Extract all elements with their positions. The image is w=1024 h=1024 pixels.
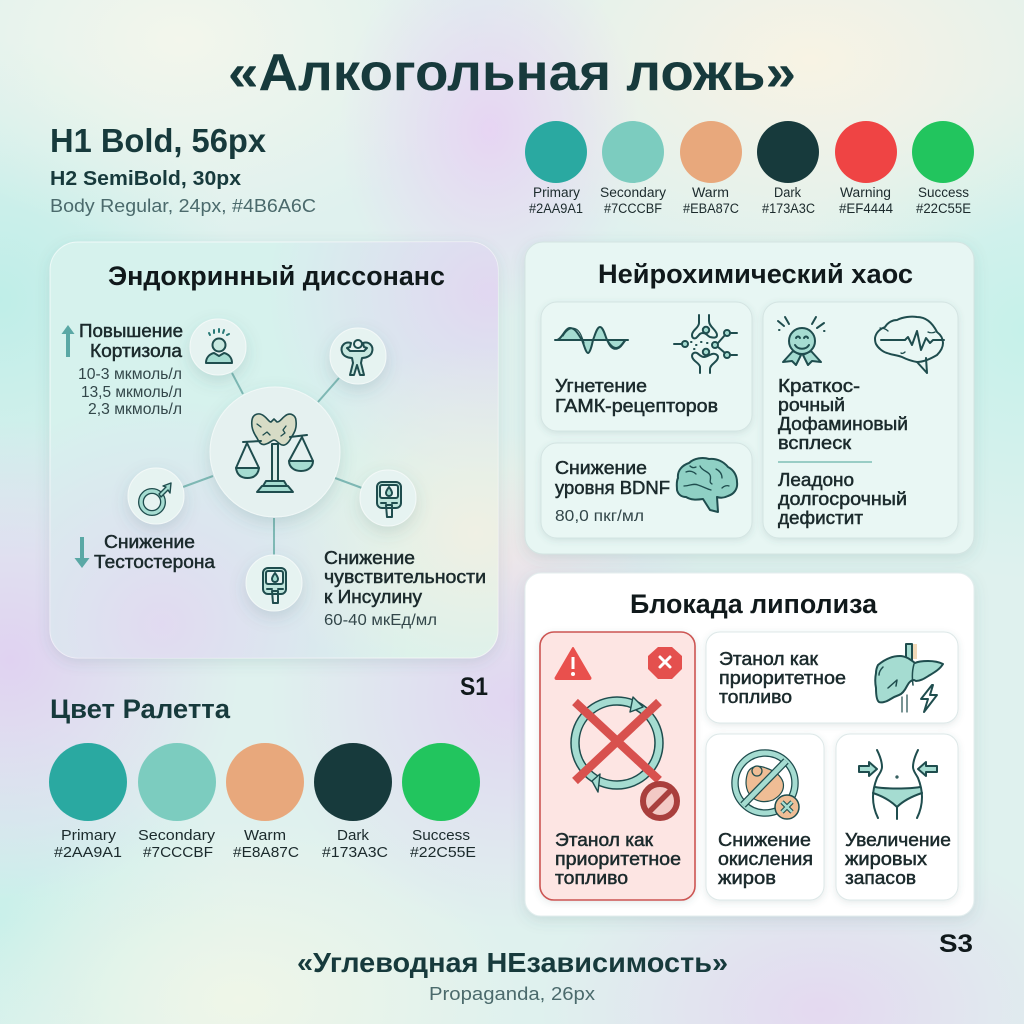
swatch: secondary [138, 743, 216, 861]
text: Снижение [718, 830, 811, 850]
testosterone text: Снижение [104, 532, 195, 552]
swatch: warm: Warm [244, 827, 286, 844]
text: приоритетное [555, 849, 681, 869]
text: 80,0 пкг/мл [555, 508, 644, 525]
text: приоритетное [719, 668, 846, 688]
node: glucose meter [360, 470, 416, 526]
H2 sample: H2 SemiBold, 30px [50, 167, 242, 190]
testosterone text: Тестостерона [94, 552, 216, 572]
swatch: secondary: Secondary [138, 827, 216, 844]
text [555, 830, 681, 888]
panel heading: Эндокринный диссонанс [108, 261, 445, 291]
text [778, 376, 908, 528]
panel: endocrine dissonance [50, 242, 498, 658]
swatch: primary [49, 743, 127, 861]
footer [297, 947, 728, 1004]
swatch: warm: #E8A87C [233, 844, 299, 861]
text: Леадоно [778, 470, 854, 490]
swatch: dark: Dark [774, 185, 801, 200]
swatch: warm: Warm [692, 185, 729, 200]
text [845, 830, 951, 888]
swatch: warm [226, 743, 304, 861]
card: GABA receptors [541, 302, 752, 431]
icon: liver [875, 644, 943, 712]
swatch: dark: #173A3C [762, 201, 815, 216]
icon: warning triangle [556, 648, 590, 679]
swatch: success: Success [412, 827, 470, 844]
swatch: dark: #173A3C [322, 844, 388, 861]
text: дефистит [778, 508, 863, 528]
insulin text: к Инсулину [324, 587, 422, 607]
icon: waist [859, 750, 937, 819]
text: топливо [719, 687, 792, 707]
text: запасов [845, 868, 916, 888]
icon: brain with pulse [875, 317, 944, 373]
text [719, 649, 846, 707]
text: Этанол как [555, 830, 653, 850]
cortisol text: 2,3 мкмоль/л [88, 401, 182, 418]
swatch: success: Success [918, 185, 969, 200]
icon: prohibition sign [643, 784, 677, 818]
icon: stop octagon [648, 647, 682, 679]
icon: wave [555, 327, 628, 353]
panel card [50, 242, 498, 658]
swatch: secondary: #7CCCBF [604, 201, 662, 216]
card: fat stores [836, 734, 958, 900]
text [555, 376, 718, 416]
card: dopamine [763, 302, 958, 538]
text: Дофаминовый [778, 414, 908, 434]
typography specimen [50, 122, 316, 216]
icon: prohibited fat cell [735, 753, 799, 819]
swatch: warning [835, 121, 897, 216]
panel heading: Блокада липолиза [630, 589, 878, 619]
bottom colour palette [49, 743, 480, 861]
swatch: secondary: #7CCCBF [143, 844, 213, 861]
palette heading: Цвет Ралетта [50, 694, 231, 724]
swatch: success [402, 743, 480, 861]
swatch: warning: #EF4444 [839, 201, 893, 216]
insulin text: Снижение [324, 548, 415, 568]
swatch: primary: #2AA9A1 [529, 201, 583, 216]
swatch: warm: #EBA87C [683, 201, 739, 216]
footer title: «Углеводная НЕзависимость» [297, 947, 728, 978]
icon: brain [677, 458, 737, 512]
panel: lipolysis blockade [525, 573, 974, 916]
text: уровня BDNF [555, 478, 670, 498]
swatch: primary: Primary [533, 185, 580, 200]
icon: synapse [674, 315, 737, 373]
text: рочный [778, 395, 845, 415]
swatch: secondary: Secondary [600, 185, 666, 200]
node: stressed person [190, 319, 246, 375]
cortisol text: 13,5 мкмоль/л [81, 384, 182, 401]
text: топливо [555, 868, 628, 888]
swatch: primary [525, 121, 587, 216]
hub: thyroid on scales [210, 387, 340, 517]
text: ГАМК-рецепторов [555, 396, 718, 416]
card: BDNF [541, 443, 752, 538]
swatch: primary: Primary [61, 827, 117, 844]
cortisol text: 10-3 мкмоль/л [78, 366, 182, 383]
swatch: dark [314, 743, 392, 861]
label S1: S1 [460, 673, 488, 701]
icon: crossed cycle [575, 697, 659, 792]
card: ethanol warning [540, 632, 695, 900]
card: fat oxidation [706, 734, 824, 900]
text: Снижение [555, 458, 647, 478]
body sample: Body Regular, 24px, #4B6A6C [50, 196, 316, 216]
icon: smile badge [778, 317, 824, 365]
cortisol text [78, 321, 183, 418]
text: Увеличение [845, 830, 951, 850]
cortisol text: Повышение [79, 321, 183, 341]
panel card [525, 242, 974, 554]
cortisol text: Кортизола [90, 341, 183, 361]
label S3: S3 [939, 930, 973, 958]
swatch: secondary [600, 121, 666, 216]
insulin text [324, 548, 486, 629]
text: Краткос- [778, 376, 860, 396]
insulin text: 60-40 мкЕд/мл [324, 612, 437, 629]
top colour palette [525, 121, 974, 216]
panel heading: Нейрохимический хаос [598, 259, 913, 289]
arrow: up [62, 325, 74, 357]
H1 sample: H1 Bold, 56px [50, 122, 267, 159]
testosterone text [94, 532, 216, 572]
text: жировых [845, 849, 927, 869]
text: всплеск [778, 433, 851, 453]
panel: neurochemical chaos [525, 242, 974, 554]
title: «Алкогольная ложь» [228, 44, 796, 102]
text: Этанол как [719, 649, 818, 669]
swatch: success: #22C55E [916, 201, 971, 216]
text: Угнетение [555, 376, 647, 396]
card: ethanol fuel, liver [706, 632, 958, 723]
text: долгосрочный [778, 489, 907, 509]
swatch: warm [680, 121, 742, 216]
swatch: success: #22C55E [410, 844, 476, 861]
node: insulin meter [246, 555, 302, 611]
node: male symbol [128, 468, 184, 524]
text: жиров [718, 868, 776, 888]
insulin text: чувствительности [324, 567, 486, 587]
swatch: warning: Warning [840, 185, 891, 200]
swatch: dark [757, 121, 819, 216]
swatch: primary: #2AA9A1 [54, 844, 122, 861]
text [555, 458, 670, 525]
text [718, 830, 813, 888]
text: окисления [718, 849, 813, 869]
panel card [525, 573, 974, 916]
connector lines [183, 373, 362, 555]
swatch: success [912, 121, 974, 216]
footer subtitle: Propaganda, 26px [429, 984, 595, 1004]
arrow: down [74, 537, 90, 568]
swatch: dark: Dark [337, 827, 370, 844]
node: muscular figure [330, 328, 386, 384]
